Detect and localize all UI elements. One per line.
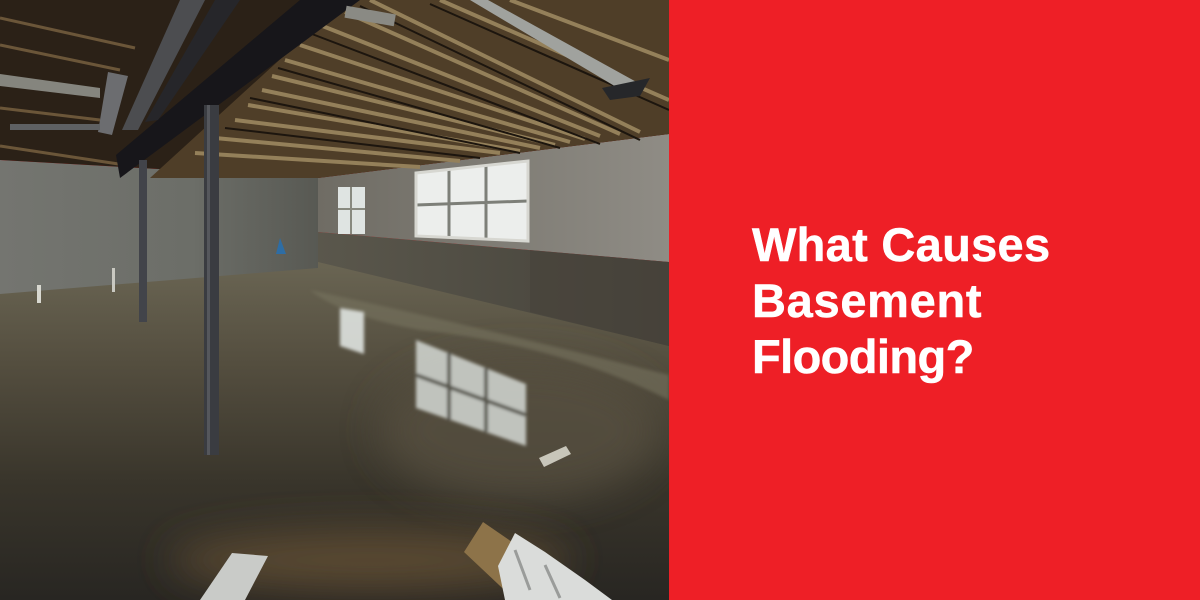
window: large bbox=[416, 161, 528, 241]
title bbox=[752, 218, 1050, 384]
floor bbox=[0, 262, 669, 600]
panel: red title background bbox=[669, 0, 1200, 600]
back wall bbox=[0, 160, 318, 294]
title: Flooding? bbox=[752, 330, 974, 383]
window reflections on floor bbox=[340, 308, 526, 446]
ducts and pipes bbox=[10, 0, 650, 178]
title: What Causes bbox=[752, 218, 1050, 271]
wall details bbox=[37, 238, 286, 303]
window: small bbox=[338, 187, 365, 234]
photo: flooded unfinished basement bbox=[0, 0, 669, 600]
right wall bbox=[318, 134, 669, 346]
title: Basement bbox=[752, 274, 982, 327]
debris on floor bbox=[200, 446, 612, 600]
columns bbox=[139, 105, 219, 455]
ceiling with joists bbox=[0, 0, 669, 178]
